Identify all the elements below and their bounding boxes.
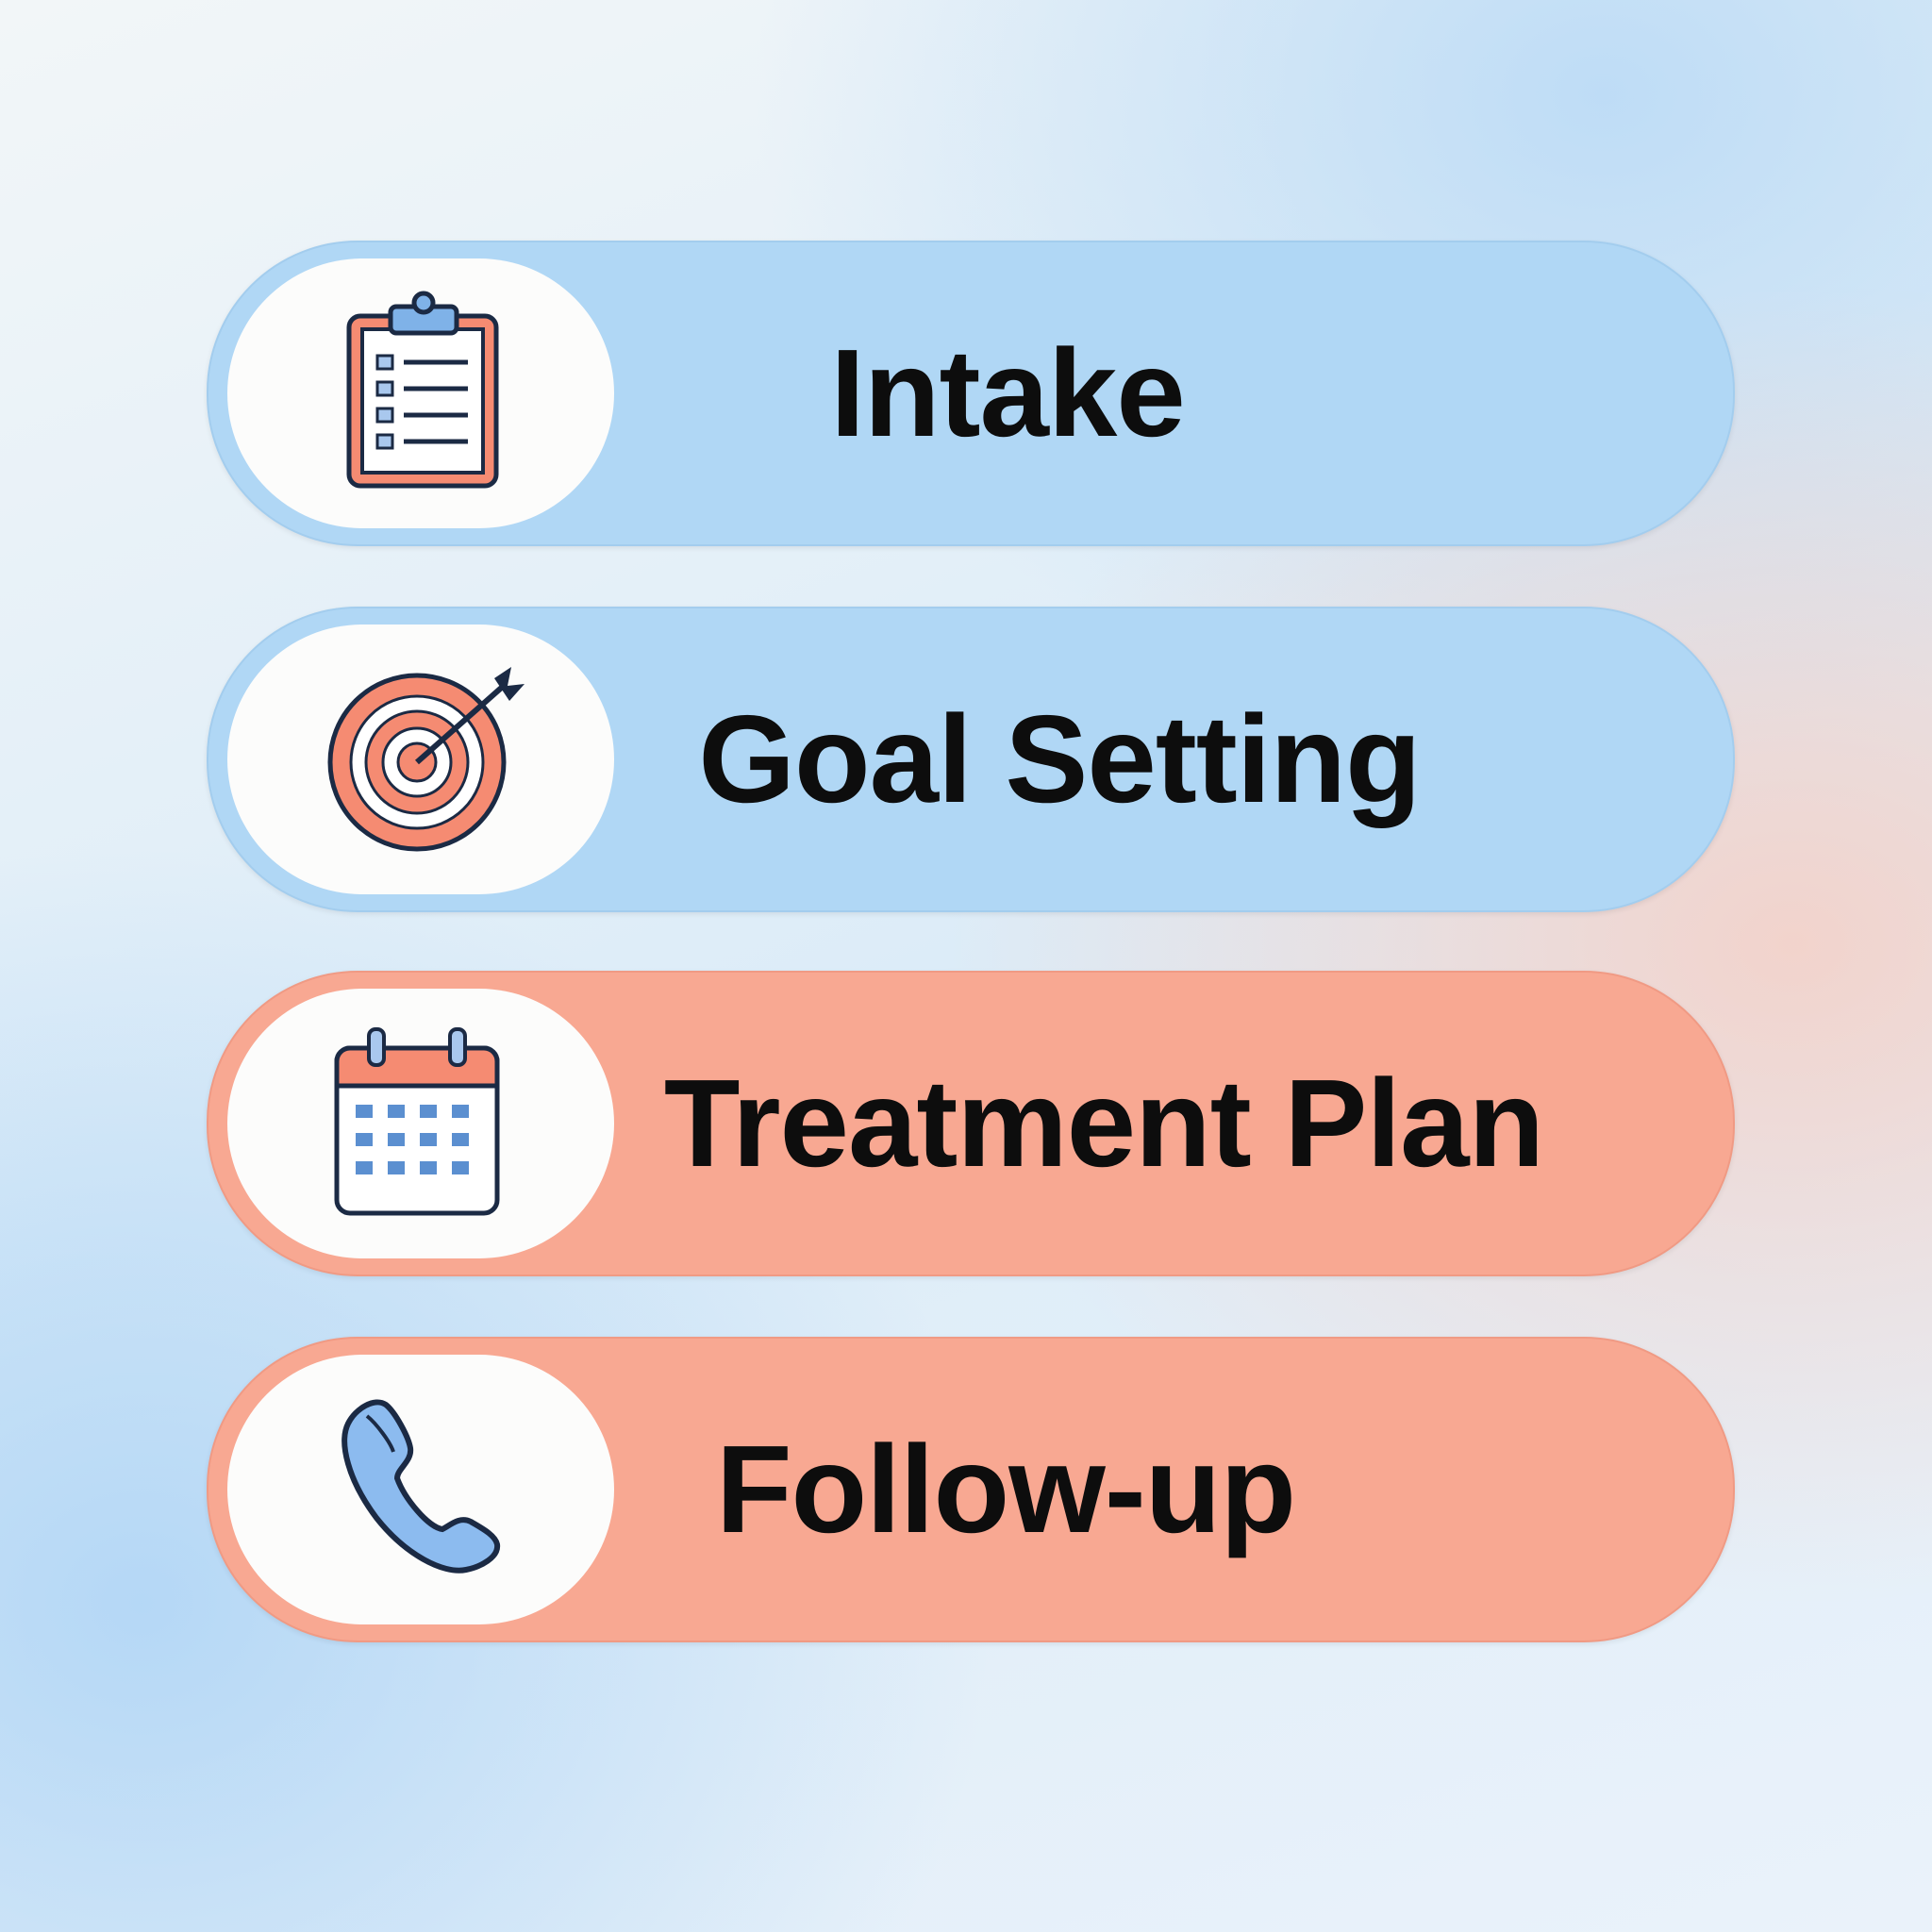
label: Intake [830,324,1185,462]
pill: Goal Setting [207,607,1735,912]
label: Follow-up [716,1420,1295,1558]
label: Treatment Plan [664,1054,1543,1192]
icon: target [328,667,525,851]
pill: Treatment Plan [207,971,1735,1276]
icon: phone [341,1400,500,1574]
pill: Intake [207,241,1735,546]
pill: Follow-up [207,1337,1735,1642]
icon: calendar [334,1027,500,1215]
icon: clipboard [347,291,498,489]
label: Goal Setting [698,690,1421,828]
